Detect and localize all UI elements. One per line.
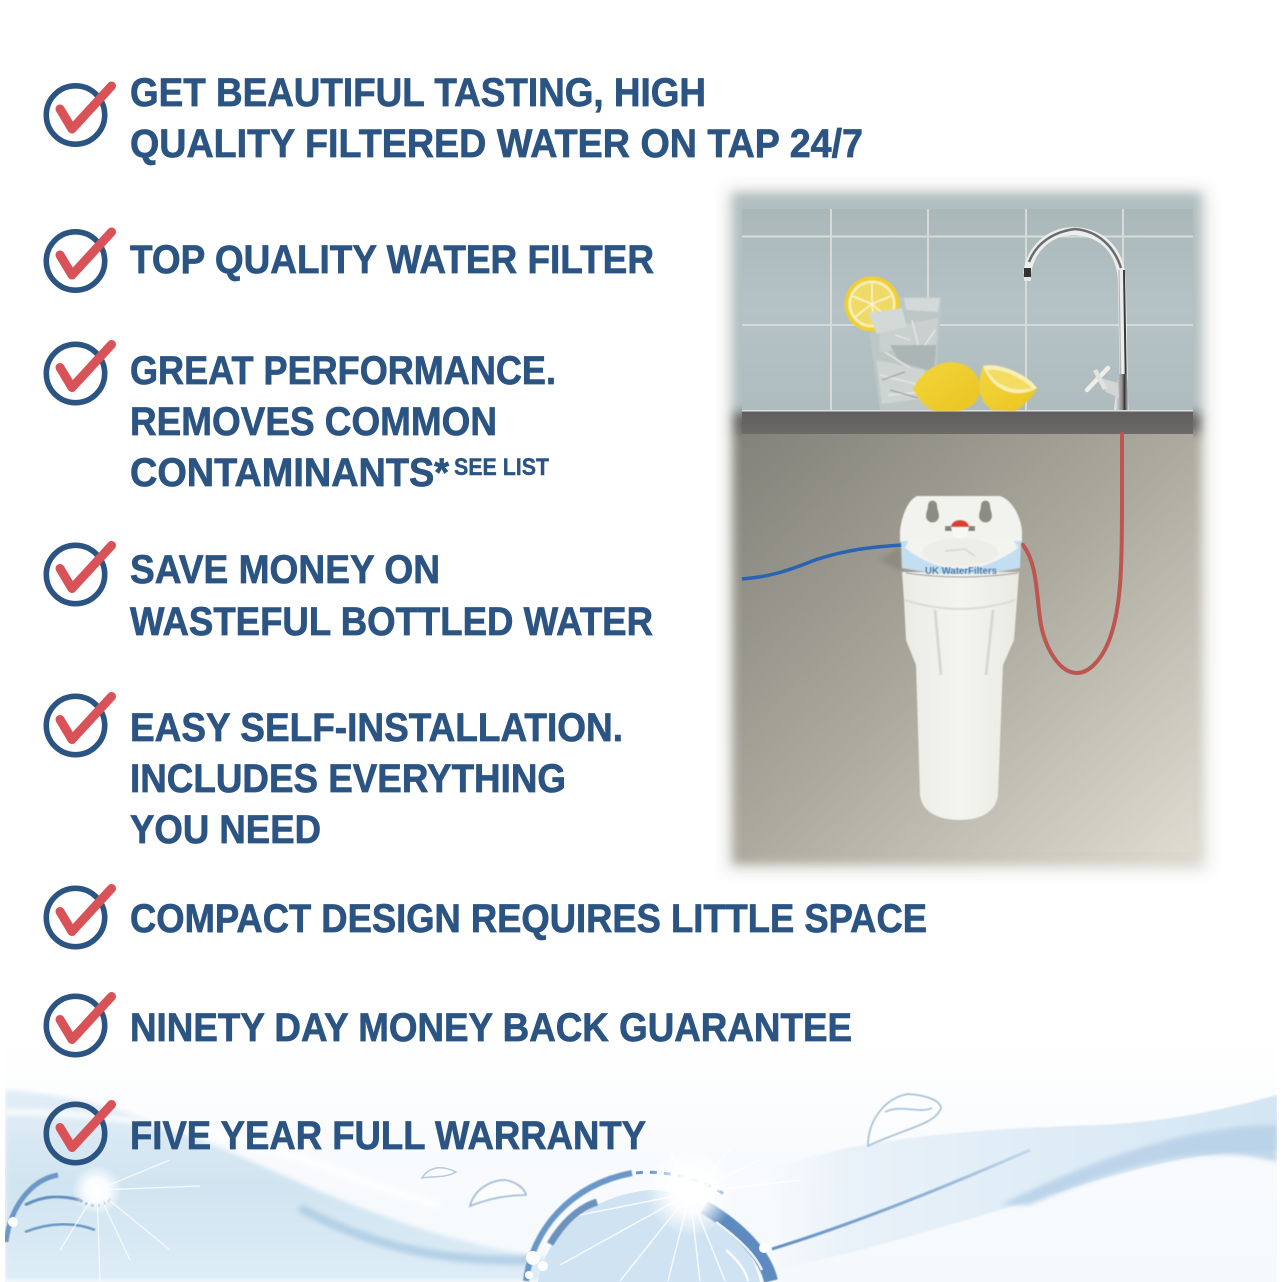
red outlet pipe	[1023, 434, 1122, 673]
text block: REMOVES COMMON	[130, 400, 497, 444]
chrome faucet	[1024, 229, 1129, 410]
half lemon	[979, 365, 1037, 411]
text block: SEE LIST	[454, 454, 549, 481]
mounting bracket	[900, 496, 1022, 542]
list item: save money	[46, 545, 653, 644]
text block	[130, 349, 556, 495]
text block: WASTEFUL BOTTLED WATER	[130, 600, 653, 644]
icon: check mark	[46, 1104, 111, 1163]
filter shadow	[882, 546, 902, 570]
list item: money back guarantee	[46, 996, 852, 1055]
icon: check mark	[46, 545, 111, 604]
droplet: tiny middle	[422, 1168, 456, 1178]
icon: check mark	[46, 696, 111, 755]
icon: check mark	[46, 344, 111, 403]
text block: GET BEAUTIFUL TASTING, HIGH	[130, 71, 706, 115]
text block: NINETY DAY MONEY BACK GUARANTEE	[130, 1006, 852, 1050]
wave: dark right ribbon	[1000, 1125, 1277, 1205]
text block: INCLUDES EVERYTHING	[130, 757, 566, 801]
filter housing	[902, 572, 1019, 820]
droplet: left sparkle	[6, 1160, 200, 1281]
list item: beautiful tasting water	[46, 71, 863, 166]
wall tiles	[742, 209, 1193, 411]
background: water waves and droplets	[5, 1088, 1277, 1282]
icon: check mark	[46, 232, 111, 290]
photo backdrop with soft edges	[727, 190, 1207, 870]
wave: left white streak	[6, 1108, 178, 1132]
text block	[130, 548, 653, 644]
water filter unit	[880, 496, 1022, 820]
wave: right flowing band	[809, 1094, 1277, 1258]
lemon slice	[844, 276, 900, 332]
whole lemon	[913, 362, 980, 411]
wall below counter	[742, 434, 1193, 440]
text block: COMPACT DESIGN REQUIRES LITTLE SPACE	[130, 897, 927, 941]
icon: check mark	[46, 888, 111, 947]
list item: five year warranty	[46, 1104, 646, 1163]
text block	[130, 706, 623, 852]
panel: product photo	[727, 190, 1207, 870]
text block: YOU NEED	[130, 808, 321, 852]
water filter unit: UK WaterFilters	[925, 566, 997, 577]
text block: SAVE MONEY ON	[130, 548, 440, 592]
droplet: large	[522, 1170, 800, 1282]
wave: left ribbon shade	[300, 1208, 530, 1260]
wave: left flowing band	[5, 1090, 600, 1280]
text block: CONTAMINANTS*	[130, 451, 449, 495]
text block: EASY SELF-INSTALLATION.	[130, 706, 623, 750]
counter top	[742, 410, 1193, 434]
glass of water	[870, 297, 942, 410]
text block: GREAT PERFORMANCE.	[130, 349, 556, 393]
icon: check mark	[46, 996, 111, 1055]
text block: TOP QUALITY WATER FILTER	[130, 238, 654, 282]
list item: compact design	[46, 888, 927, 947]
label band	[901, 541, 1021, 574]
text block	[130, 71, 863, 166]
list item: easy installation	[46, 696, 623, 852]
list item: top quality filter	[46, 232, 654, 290]
list item: great performance	[46, 344, 556, 495]
droplet: upper right	[868, 1094, 941, 1146]
droplet: small middle	[470, 1180, 526, 1206]
text block: FIVE YEAR FULL WARRANTY	[130, 1114, 646, 1158]
icon: check mark	[46, 86, 111, 144]
wave: thin ribbon to droplet	[772, 1150, 1030, 1249]
ice in front of slice	[868, 308, 907, 334]
text block: QUALITY FILTERED WATER ON TAP 24/7	[130, 122, 863, 166]
blue inlet pipe	[742, 545, 902, 579]
